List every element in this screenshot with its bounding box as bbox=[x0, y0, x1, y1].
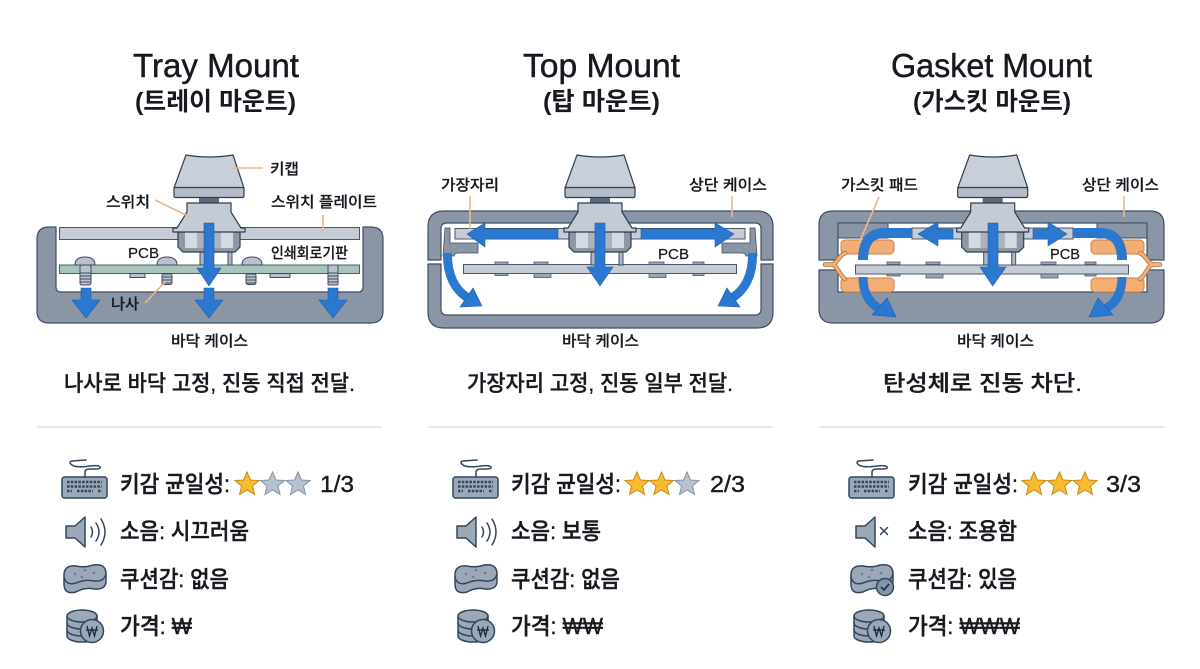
spec: noise: 소음: 조용함 bbox=[908, 518, 1017, 544]
diagram: tray mount cross-section bbox=[37, 155, 383, 350]
label: PCB: PCB bbox=[128, 245, 159, 262]
label: switch plate: 스위치 플레이트 bbox=[271, 194, 377, 211]
rating stars 2 of 3 bbox=[625, 472, 699, 494]
label: keycap: 키캡 bbox=[270, 161, 299, 178]
description: 탄성체로 진동 차단. bbox=[883, 371, 1082, 396]
title: Top Mount: Top Mount bbox=[523, 47, 680, 84]
label: bottom case: 바닥 케이스 bbox=[171, 333, 248, 350]
icon: sponge bbox=[64, 565, 106, 593]
panel: Tray Mount bbox=[37, 47, 383, 642]
switch plate bbox=[60, 228, 360, 240]
diagram: gasket mount cross-section bbox=[819, 155, 1164, 350]
icon: coins bbox=[67, 610, 104, 642]
icon: loud speaker bbox=[66, 517, 105, 547]
rating value: 2/3 bbox=[710, 471, 745, 497]
spec: cushioning: 쿠션감: 없음 bbox=[511, 566, 620, 592]
PCB components bbox=[887, 262, 1096, 278]
lower case bbox=[819, 270, 1164, 323]
rating value: 3/3 bbox=[1106, 471, 1141, 497]
description: 나사로 바닥 고정, 진동 직접 전달. bbox=[64, 371, 355, 396]
spec: price: 가격: ₩₩ bbox=[511, 613, 603, 639]
spec: cushioning: 쿠션감: 없음 bbox=[120, 566, 229, 592]
gasket pads bbox=[841, 240, 1144, 292]
upper case bbox=[819, 211, 1164, 260]
spec rows bbox=[849, 460, 1141, 642]
label: switch: 스위치 bbox=[106, 194, 150, 211]
spec: key feel uniformity: 키감 균일성: bbox=[120, 471, 230, 497]
spec: price: 가격: ₩₩₩ bbox=[908, 613, 1020, 639]
subtitle: top mount Korean: (탑 마운트) bbox=[543, 88, 660, 116]
title: Tray Mount: Tray Mount bbox=[133, 47, 299, 84]
spec rows bbox=[62, 460, 354, 642]
icon: sponge with check bbox=[851, 565, 894, 596]
PCB bbox=[464, 264, 736, 274]
PCB bbox=[60, 265, 360, 274]
inner lip bbox=[838, 223, 1147, 238]
icon: coins bbox=[854, 610, 890, 642]
spec: noise: 소음: 시끄러움 bbox=[120, 518, 249, 544]
switch plate bbox=[455, 228, 745, 239]
subtitle: gasket mount Korean: (가스킷 마운트) bbox=[913, 88, 1071, 116]
spec rows bbox=[453, 460, 745, 642]
leader lines bbox=[859, 196, 1124, 243]
description: 가장자리 고정, 진동 일부 전달. bbox=[467, 371, 733, 396]
icon: muted speaker bbox=[856, 517, 888, 547]
keycap and switch bbox=[173, 155, 245, 265]
spec: cushioning: 쿠션감: 있음 bbox=[908, 566, 1017, 592]
keycap and switch bbox=[957, 155, 1029, 265]
label: top case: 상단 케이스 bbox=[689, 177, 767, 194]
vibration arrows bbox=[72, 223, 347, 318]
vibration arrows bbox=[447, 223, 753, 307]
spec: key feel uniformity: 키감 균일성: bbox=[511, 471, 621, 497]
screws bbox=[75, 257, 338, 285]
diagram: top mount cross-section bbox=[428, 155, 773, 350]
label: edge: 가장자리 bbox=[441, 177, 499, 194]
PCB bbox=[856, 265, 1128, 274]
spec: key feel uniformity: 키감 균일성: bbox=[908, 471, 1018, 497]
leader lines bbox=[145, 168, 323, 303]
upper case bbox=[428, 211, 773, 260]
subtitle: tray mount Korean: (트레이 마운트) bbox=[135, 88, 296, 116]
corner brackets bbox=[443, 228, 757, 256]
icon: keyboard bbox=[62, 460, 107, 498]
leader lines bbox=[470, 196, 732, 229]
spec: noise: 소음: 보통 bbox=[511, 518, 601, 544]
label: printed circuit board: 인쇄회로기판 bbox=[271, 245, 348, 262]
gasket flex arms bbox=[825, 253, 1160, 279]
rating stars 1 of 3 bbox=[235, 472, 310, 494]
PCB components bbox=[495, 262, 704, 278]
title: Gasket Mount: Gasket Mount bbox=[891, 47, 1092, 84]
label: PCB: PCB bbox=[1050, 246, 1080, 263]
label: top case: 상단 케이스 bbox=[1082, 177, 1159, 194]
keycap and switch bbox=[564, 155, 636, 265]
rating stars 3 of 3 bbox=[1022, 472, 1097, 494]
label: PCB: PCB bbox=[658, 246, 689, 263]
vibration arrows bbox=[863, 222, 1122, 317]
icon: coins bbox=[458, 610, 494, 642]
icon: sponge bbox=[455, 565, 497, 593]
label: gasket pad: 가스킷 패드 bbox=[841, 177, 918, 194]
icon: keyboard bbox=[849, 460, 894, 498]
rating value: 1/3 bbox=[320, 471, 354, 497]
label: screw: 나사 bbox=[111, 296, 139, 313]
spec: price: 가격: ₩ bbox=[120, 613, 192, 639]
lower case bbox=[428, 264, 773, 328]
label: bottom case: 바닥 케이스 bbox=[562, 333, 639, 350]
icon: keyboard bbox=[453, 460, 498, 498]
panel: Top Mount bbox=[428, 47, 773, 642]
bottom case bbox=[37, 227, 383, 323]
icon: speaker bbox=[457, 517, 496, 547]
label: bottom case: 바닥 케이스 bbox=[957, 333, 1034, 350]
panel: Gasket Mount bbox=[819, 47, 1165, 642]
